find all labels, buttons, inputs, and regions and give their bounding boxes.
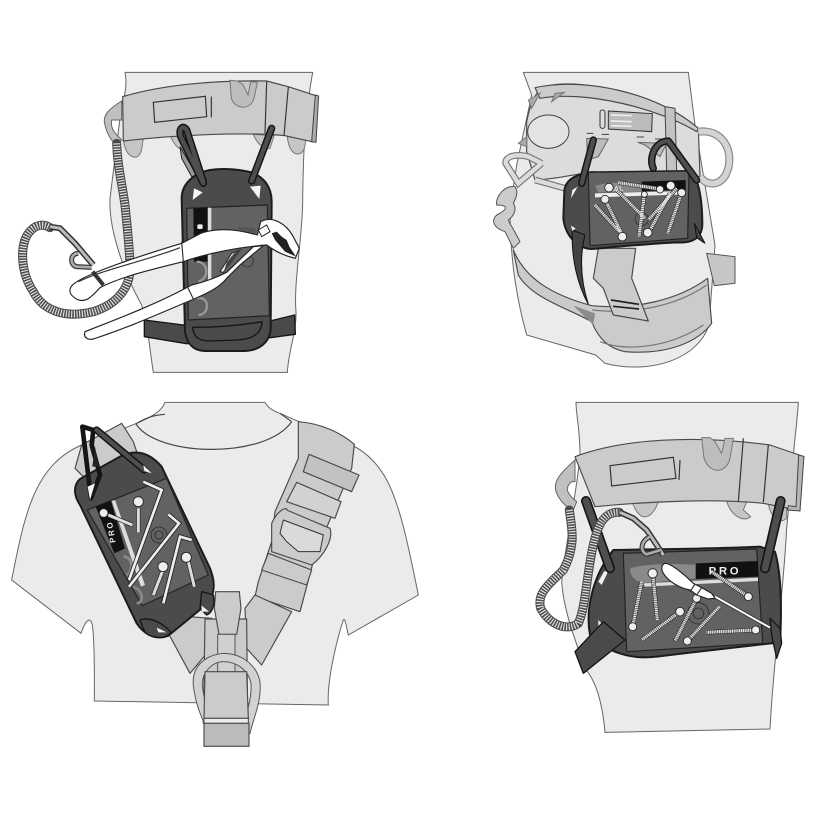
pliers: [70, 220, 299, 339]
screws: [629, 569, 760, 645]
pouch: [182, 169, 272, 351]
coiled lanyard: [23, 143, 130, 314]
side gear loop: [555, 460, 577, 510]
shadow wedge under leg loop: [573, 306, 595, 325]
pouch: [75, 453, 214, 637]
harness waist belt: [123, 80, 319, 142]
centre plate: [203, 592, 248, 723]
panel: pouch on chest strap holding hex keys: [12, 402, 418, 746]
panel: pouch on thigh holding pliers: [23, 72, 319, 372]
coiled lanyard: [540, 510, 619, 627]
left shoulder strap: [75, 423, 138, 482]
carabiner on lanyard: [620, 512, 663, 555]
carabiner on lanyard: [50, 227, 93, 267]
lower gear loops: [632, 500, 787, 520]
shirt: [12, 402, 418, 705]
pouch: PRO: [105, 520, 118, 544]
metal buckle under strap: [180, 147, 197, 177]
pouch: [589, 547, 781, 657]
pouch: EAL: [609, 184, 624, 193]
lanyard wrap on handle: [93, 272, 103, 285]
side gear loop: [104, 101, 122, 145]
elastic ruffle: [494, 187, 520, 248]
hex keys: [129, 482, 192, 603]
pouch: [563, 171, 702, 249]
right shoulder strap: [255, 422, 359, 612]
D-ring: [193, 653, 260, 733]
harness waist belt: [575, 438, 804, 511]
attachment straps: [571, 140, 705, 304]
lower gear loops: [123, 134, 306, 157]
panel: pouch on thigh holding screwdriver: [540, 402, 804, 732]
centre strap: [593, 248, 648, 321]
left hip loop: [506, 155, 565, 188]
leg loop: [513, 250, 712, 352]
attachment straps: [575, 501, 782, 673]
lower chest straps: [168, 595, 292, 673]
right strap tab: [707, 253, 735, 286]
leg: [562, 402, 798, 732]
thigh strap: [144, 315, 295, 344]
harness rear panel: [518, 84, 700, 180]
collar: [136, 413, 292, 449]
bolts: [99, 497, 194, 595]
panel: pouch on hip holding screws: [494, 72, 735, 367]
strap through D-ring: [204, 672, 249, 746]
back and legs: [510, 72, 715, 367]
attachment straps: [82, 427, 214, 637]
attachment straps: [180, 127, 272, 183]
right hip ring: [698, 131, 729, 184]
screws: [595, 181, 686, 241]
pouch: PRO: [709, 565, 741, 577]
screwdriver: [662, 563, 770, 628]
leg: [110, 72, 313, 372]
